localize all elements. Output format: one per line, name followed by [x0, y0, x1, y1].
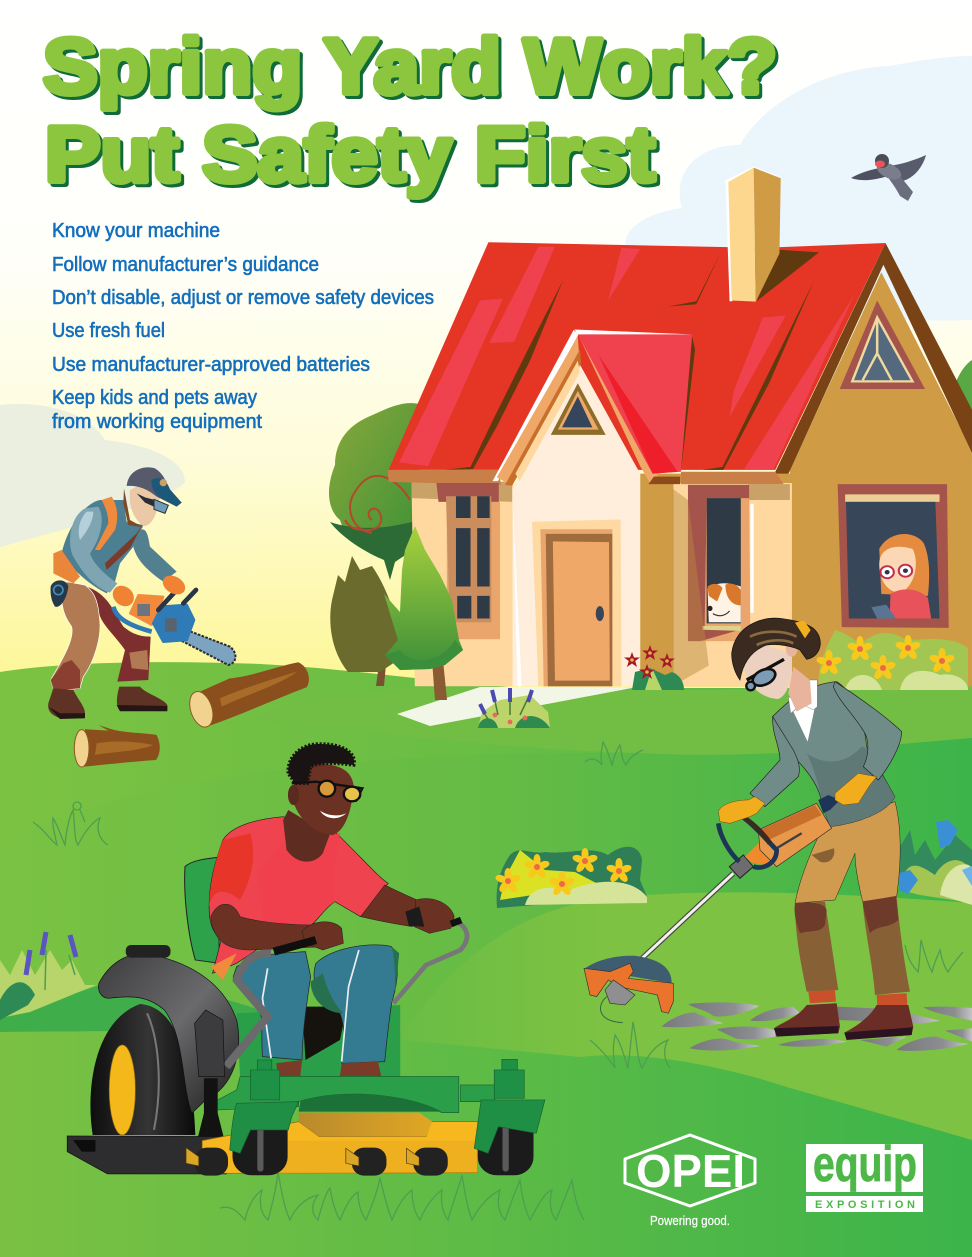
title: Spring Yard Work?	[46, 25, 780, 113]
legs	[48, 582, 167, 719]
grass tuft right	[905, 940, 963, 972]
shirt	[209, 817, 388, 980]
flowers: left lavender bush	[0, 932, 96, 1020]
background trees	[329, 403, 420, 686]
left window	[436, 483, 500, 639]
ground	[0, 662, 972, 1257]
grass tuft by trimmer	[590, 1022, 670, 1068]
arms	[211, 885, 454, 950]
logs	[74, 662, 309, 767]
jeans	[233, 945, 399, 1076]
gloves	[109, 572, 189, 610]
legs	[795, 802, 910, 1007]
icon: bird	[851, 154, 926, 201]
gloves	[718, 773, 877, 823]
head	[732, 618, 820, 712]
light foreground tree	[384, 526, 463, 700]
safety tips list: from working equipment	[52, 411, 262, 433]
door	[532, 520, 621, 686]
front roof	[574, 329, 695, 484]
back hill	[950, 360, 972, 460]
head	[123, 467, 182, 527]
logo: OPEI: OPEI	[636, 1145, 745, 1197]
grass tuft left	[33, 802, 108, 845]
title: Put Safety First	[48, 113, 658, 201]
mid wing wall	[640, 474, 792, 686]
man on zero-turn mower	[67, 744, 545, 1176]
title	[43, 22, 780, 201]
fender	[98, 953, 239, 1113]
safety tips list: Don’t disable, adjust or remove safety devices	[52, 287, 434, 309]
flowers: red flowers	[624, 645, 684, 690]
mower body green	[237, 1005, 400, 1077]
safety tips list: Know your machine	[52, 220, 220, 242]
title: Put Safety First	[45, 110, 655, 198]
small log	[74, 725, 160, 767]
eave left	[388, 470, 501, 485]
barge board	[775, 243, 972, 484]
neck and head	[283, 744, 362, 862]
logo: OPEI	[625, 1135, 755, 1228]
girl	[871, 534, 931, 618]
logo: OPEI: Powering good.	[650, 1214, 730, 1228]
logo: equip exposition: equip	[813, 1136, 917, 1192]
chainsaw	[113, 590, 235, 665]
big log	[186, 662, 309, 730]
flowers: lavender bush by path	[478, 688, 550, 728]
stones	[662, 1002, 972, 1051]
control levers	[226, 920, 467, 1067]
icon: path	[397, 687, 632, 726]
grass tuft upper	[585, 742, 643, 765]
house	[388, 167, 972, 686]
woman with string trimmer	[584, 618, 972, 1051]
left wing wall	[411, 481, 513, 686]
mid window with dog	[688, 485, 754, 641]
olive tree	[330, 556, 400, 686]
sweater	[750, 680, 902, 827]
flowers: mid lawn bush	[494, 847, 647, 908]
flowers: yellow bush by house	[815, 630, 968, 690]
safety tips list: Follow manufacturer’s guidance	[52, 254, 319, 276]
rear foot plate	[67, 1136, 230, 1174]
safety tips list: Use manufacturer-approved batteries	[52, 354, 370, 376]
logo: equip exposition	[806, 1136, 923, 1212]
green deck frame	[218, 1059, 524, 1113]
torso and arms	[51, 497, 177, 607]
right window with girl	[838, 484, 949, 628]
flowers: blue bush right	[898, 820, 972, 905]
small deck wheels	[186, 1148, 448, 1176]
safety tips list	[52, 220, 434, 433]
chimney	[725, 167, 782, 302]
title: Spring Yard Work?	[43, 22, 777, 110]
right gable wall	[786, 272, 972, 686]
background sky	[0, 0, 972, 700]
trimmer	[584, 795, 840, 1023]
chainsaw worker	[48, 467, 235, 719]
cloud right	[625, 56, 972, 321]
center gable wall	[513, 361, 640, 686]
big round tree	[329, 403, 420, 580]
safety tips list: Use fresh fuel	[52, 320, 165, 342]
dog	[708, 583, 741, 622]
caster wheels	[230, 1100, 545, 1175]
boots	[774, 1003, 913, 1040]
grass tuft bottom	[220, 1172, 584, 1220]
yellow deck	[202, 1113, 478, 1173]
large tire	[90, 1004, 195, 1135]
logo: equip exposition: EXPOSITION	[815, 1199, 915, 1211]
safety tips list: Keep kids and pets away	[52, 387, 257, 409]
roof	[389, 242, 885, 470]
seat	[185, 857, 219, 963]
small gable window	[551, 383, 606, 435]
gable window	[840, 301, 925, 389]
cloud left	[0, 404, 185, 547]
gable trim	[493, 330, 579, 481]
bracket	[195, 1010, 225, 1077]
